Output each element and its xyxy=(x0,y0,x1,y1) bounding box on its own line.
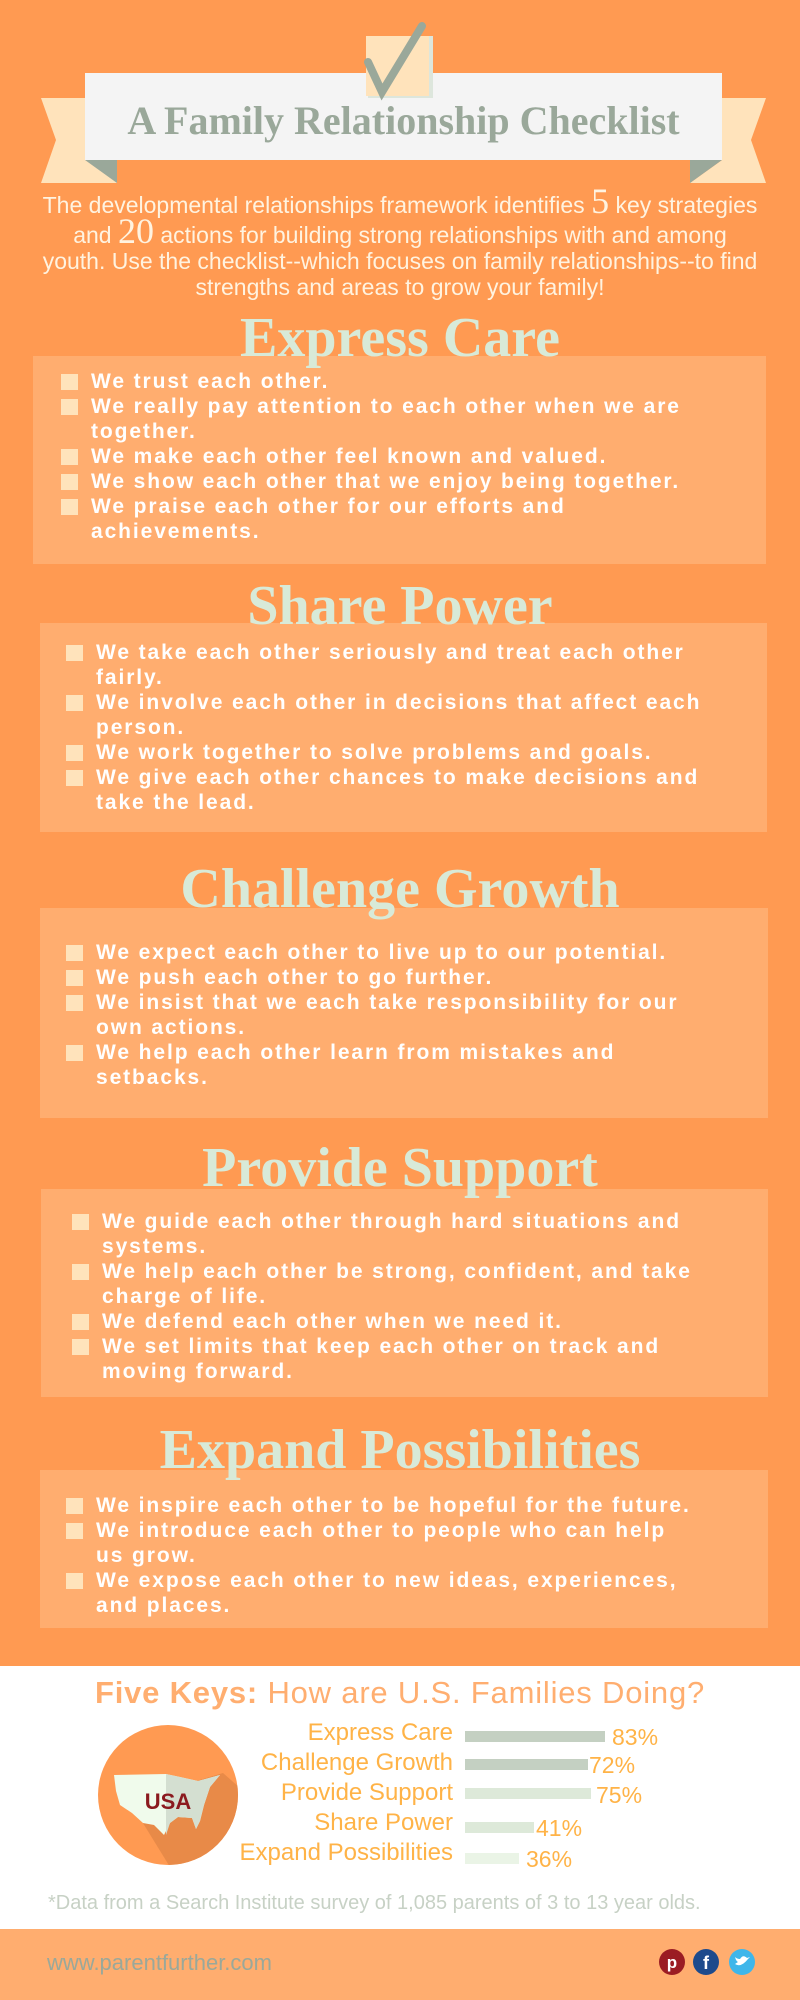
panel: express care: We make each other feel known and valued. xyxy=(91,445,607,468)
icon: USA circle: USA xyxy=(145,1789,191,1814)
panel: five keys survey xyxy=(0,1666,800,1929)
bar chart: 41% xyxy=(536,1815,582,1841)
panel: challenge growth: We insist that we each take responsibility for our xyxy=(96,991,678,1014)
intro text: strengths and areas to grow your family! xyxy=(195,274,605,300)
bar chart: Expand Possibilities xyxy=(240,1839,453,1866)
icons: social: f xyxy=(703,1953,710,1973)
bar chart: 75% xyxy=(596,1782,642,1808)
panel: provide support: We set limits that keep each other on track and xyxy=(102,1335,660,1358)
heading: Share Power: Share Power xyxy=(247,575,553,637)
panel: share power: We take each other seriously and treat each other xyxy=(96,641,685,664)
panel: express care: We praise each other for our efforts and xyxy=(91,495,566,518)
panel: expand possibilities xyxy=(40,1470,768,1628)
panel: challenge growth: We push each other to go further. xyxy=(96,966,493,989)
panel: express care: achievements. xyxy=(91,520,260,543)
ribbon tails xyxy=(41,98,766,183)
panel: share power xyxy=(40,623,767,832)
panel: provide support: moving forward. xyxy=(102,1360,294,1383)
title banner xyxy=(85,73,722,160)
intro text: The developmental relationships framework identifies 5 key strategies xyxy=(43,181,757,221)
heading: Provide Support: Provide Support xyxy=(202,1137,598,1199)
icon: USA circle xyxy=(98,1725,238,1865)
panel: express care: We trust each other. xyxy=(91,370,329,393)
panel: provide support xyxy=(41,1189,768,1397)
footer url: www.parentfurther.com xyxy=(47,1950,272,1975)
bar chart: 36% xyxy=(526,1846,572,1872)
panel: expand possibilities: We expose each other to new ideas, experiences, xyxy=(96,1569,677,1592)
panel: share power: We give each other chances to make decisions and xyxy=(96,766,699,789)
footer xyxy=(0,1929,800,2000)
panel: share power: take the lead. xyxy=(96,791,256,814)
panel: expand possibilities: We inspire each other to be hopeful for the future. xyxy=(96,1494,691,1517)
bar chart: 72% xyxy=(589,1752,635,1778)
panel: share power: fairly. xyxy=(96,666,164,689)
intro text: youth. Use the checklist--which focuses on family relationships--to find xyxy=(43,248,757,274)
panel: express care xyxy=(33,356,766,564)
bar chart: Challenge Growth xyxy=(261,1749,453,1776)
icons: social: p xyxy=(667,1953,677,1972)
panel: provide support: We defend each other when we need it. xyxy=(102,1310,563,1333)
panel: provide support: We guide each other through hard situations and xyxy=(102,1210,681,1233)
bar chart xyxy=(240,1719,658,1872)
heading: Express Care: Express Care xyxy=(240,307,560,369)
panel: challenge growth: setbacks. xyxy=(96,1066,209,1089)
bar chart: Share Power xyxy=(314,1809,453,1836)
title banner: A Family Relationship Checklist xyxy=(127,98,680,143)
heading: Expand Possibilities: Expand Possibilities xyxy=(160,1419,640,1481)
icons: social xyxy=(659,1949,755,1975)
heading: Challenge Growth: Challenge Growth xyxy=(180,858,620,920)
panel: challenge growth: own actions. xyxy=(96,1016,246,1039)
panel: expand possibilities: and places. xyxy=(96,1594,231,1617)
panel: share power: person. xyxy=(96,716,185,739)
panel: express care: We show each other that we enjoy being together. xyxy=(91,470,680,493)
footnote: *Data from a Search Institute survey of 1,085 parents of 3 to 13 year olds. xyxy=(48,1892,701,1914)
panel: challenge growth xyxy=(40,908,768,1118)
panel: challenge growth: We help each other learn from mistakes and xyxy=(96,1041,615,1064)
bar chart: 83% xyxy=(612,1724,658,1750)
icon: checkbox with check xyxy=(364,22,433,100)
bar chart: Provide Support xyxy=(281,1779,453,1806)
panel: provide support: charge of life. xyxy=(102,1285,267,1308)
bar chart: Express Care xyxy=(308,1719,453,1746)
panel: expand possibilities: We introduce each other to people who can help xyxy=(96,1519,666,1542)
panel: expand possibilities: us grow. xyxy=(96,1544,197,1567)
panel: provide support: systems. xyxy=(102,1235,207,1258)
panel: express care: together. xyxy=(91,420,197,443)
survey heading: Five Keys: How are U.S. Families Doing? xyxy=(95,1675,705,1710)
panel: express care: We really pay attention to each other when we are xyxy=(91,395,681,418)
panel: challenge growth: We expect each other to live up to our potential. xyxy=(96,941,667,964)
panel: provide support: We help each other be strong, confident, and take xyxy=(102,1260,692,1283)
intro text: and 20 actions for building strong relationships with and among xyxy=(73,211,727,251)
panel: share power: We involve each other in decisions that affect each xyxy=(96,691,701,714)
intro text xyxy=(42,181,757,300)
panel: share power: We work together to solve problems and goals. xyxy=(96,741,653,764)
